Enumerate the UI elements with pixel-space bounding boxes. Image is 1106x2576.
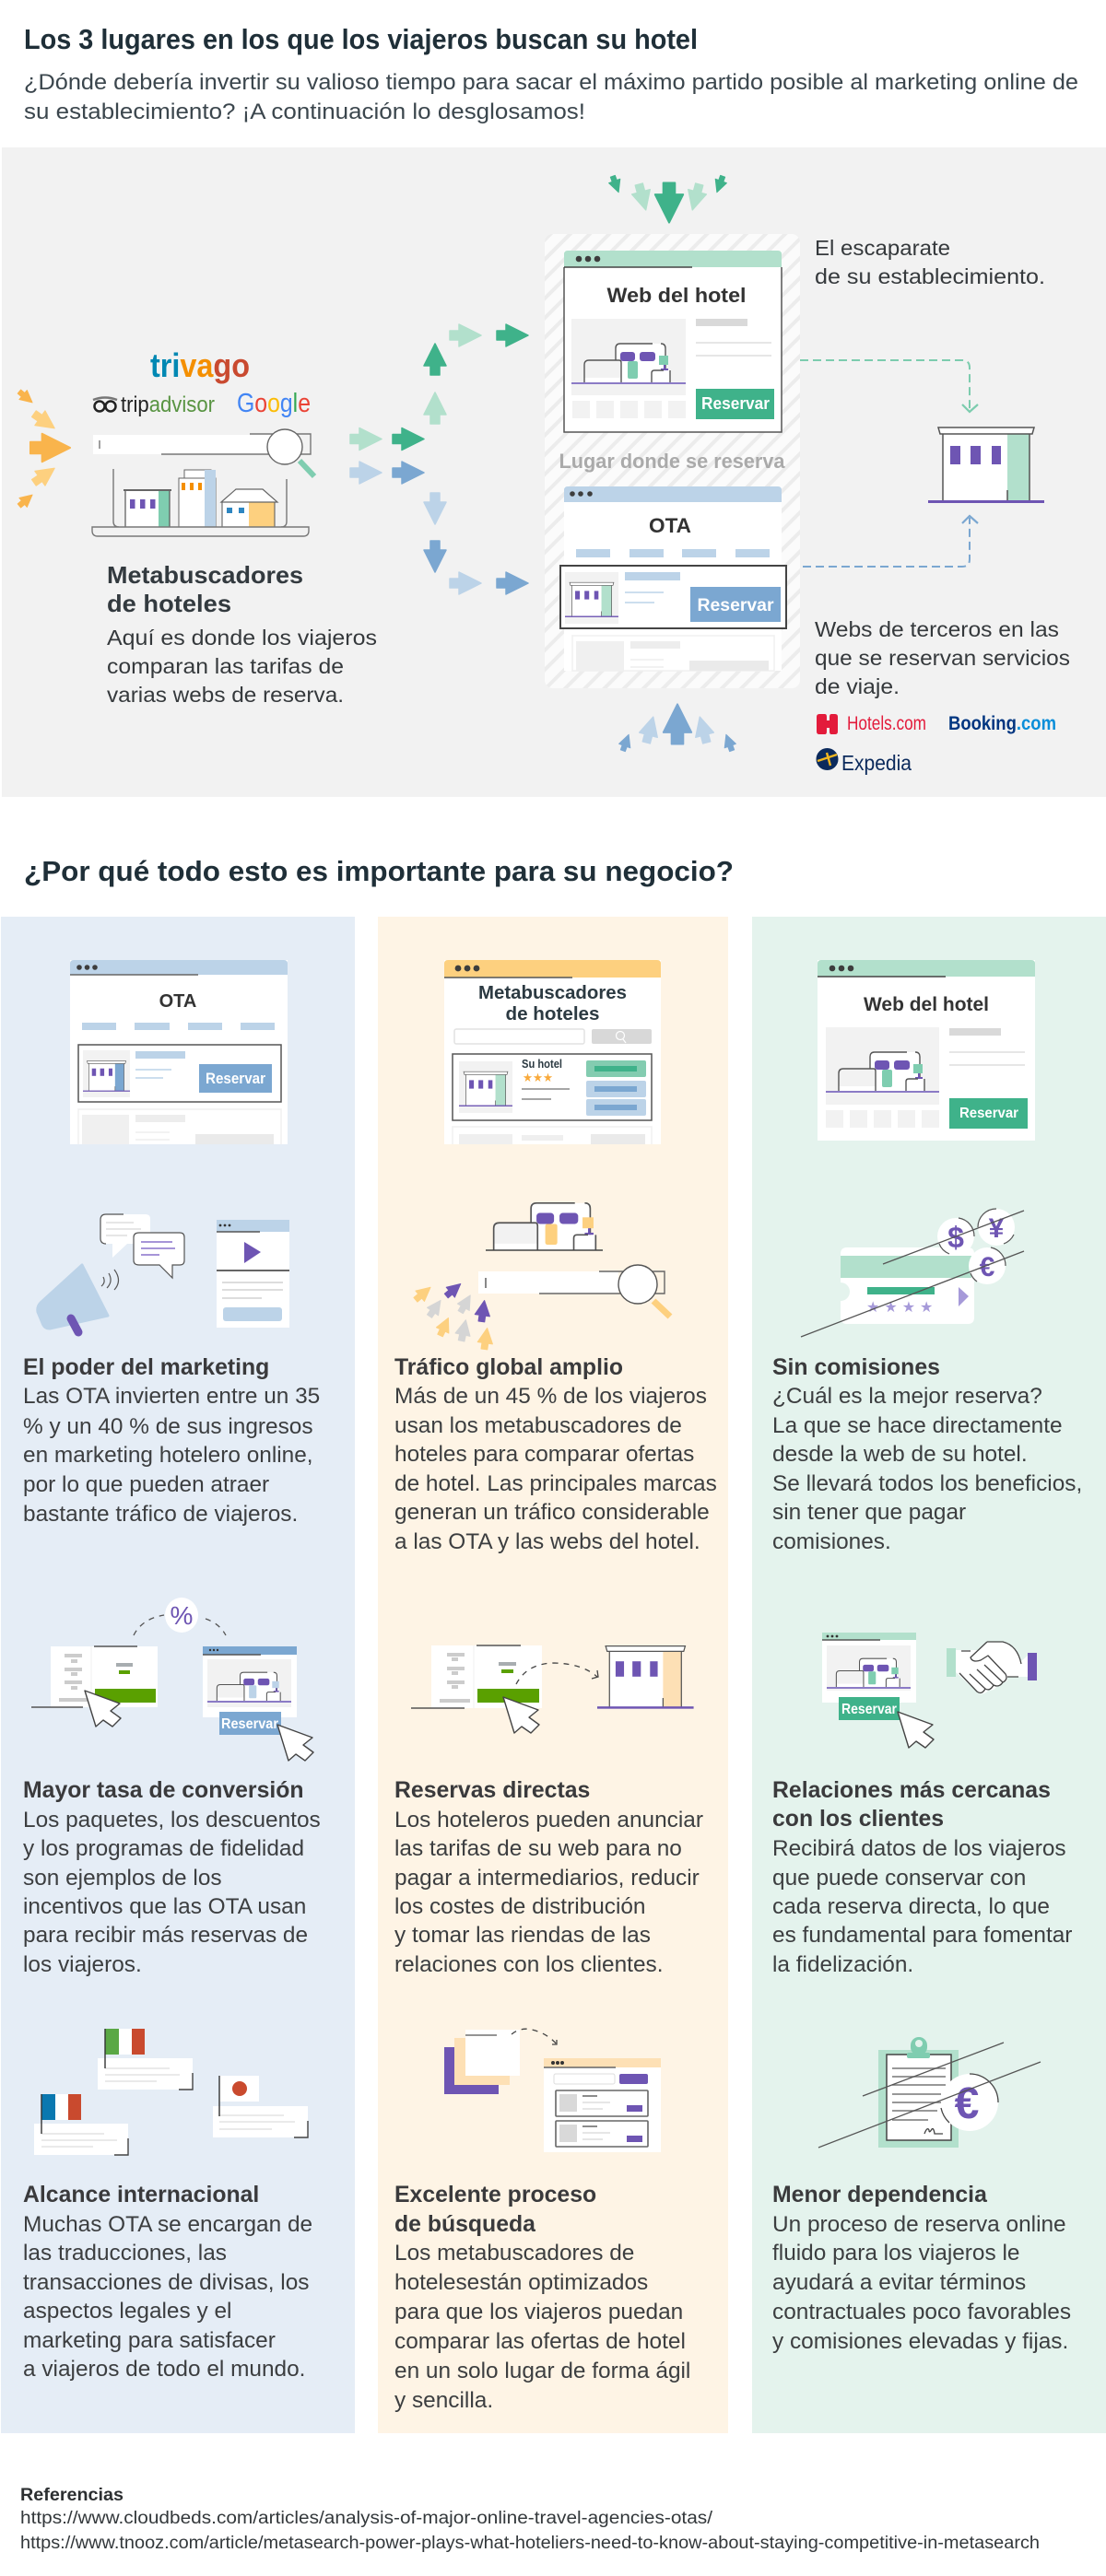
text: mayor tasa de conversión: y los programas de fidelidad [23,1836,304,1861]
text: webs de terceros: que se reservan servicios [815,646,1070,670]
text: metabuscadores de hoteles: comparan las tarifas de [107,654,344,678]
text: el escaparate: El escaparate [815,236,950,260]
text: menor dependencia: Menor dependencia [772,2183,987,2207]
text: reservas directas: relaciones con los clientes. [394,1952,664,1977]
icon: conversion with discount [31,1598,313,1761]
icon: national flags with cards [34,2029,308,2155]
text: excelente proceso de búsqueda: Los metabuscadores de [394,2241,634,2266]
text: el poder del marketing: El poder del marketing [23,1355,269,1380]
text: el poder del marketing: por lo que pueden atraer [23,1472,269,1497]
text: alcance internacional: Alcance internacional [23,2183,259,2207]
text: sin comisiones: Sin comisiones [772,1355,940,1380]
text: reservas directas [394,1778,703,1977]
logos: OTA brands: Hotels.com [847,713,926,734]
browser: metabuscadores: Metabuscadores [478,983,627,1003]
references: https://www.cloudbeds.com/articles/analysis-of-major-online-travel-agencies-otas/ [20,2509,713,2528]
icon: search bar with magnifier [93,429,314,476]
text: reservas directas: y tomar las riendas de las [394,1923,651,1948]
text: excelente proceso de búsqueda: Excelente proceso [394,2183,596,2207]
text: relaciones más cercanas [772,1778,1072,1977]
text: relaciones más cercanas: es fundamental para fomentar [772,1923,1072,1948]
browser: web del hotel: Web del hotel [864,994,989,1015]
text: mayor tasa de conversión [23,1778,321,1977]
connector: blue dashed to hotel [803,516,978,567]
text: sin comisiones [772,1355,1082,1554]
icon: clipboard contract and euro: € [955,2079,979,2128]
text: el poder del marketing [23,1355,320,1527]
arrows: blue path to OTA [350,462,528,594]
browser: metabuscadores [444,960,661,1144]
references: Referencias [20,2486,124,2505]
text: sin comisiones: La que se hace directamente [772,1413,1063,1438]
text: tráfico global amplio: generan un tráfico considerable [394,1500,710,1525]
text: mayor tasa de conversión: para recibir más reservas de [23,1923,308,1948]
icon: ticket and coins: ★★★★ [866,1300,937,1316]
references [20,2486,1040,2553]
browser: metabuscadores: de hoteles [505,1004,599,1025]
browser: OTA [70,960,288,1144]
text: reservas directas: Los hoteleros pueden anunciar [394,1808,703,1832]
text: webs de terceros: Webs de terceros en las [815,617,1059,641]
logos: OTA brands: Booking.com [948,713,1056,734]
heading: por qué es importante: ¿Por qué todo esto es importante para su negocio? [24,855,734,887]
text: mayor tasa de conversión: Mayor tasa de conversión [23,1778,304,1803]
text: alcance internacional: marketing para satisfacer [23,2328,276,2353]
icon: laptop with buildings [92,469,309,536]
browser: web del hotel: Reservar [959,1106,1018,1121]
text: excelente proceso de búsqueda: de búsqueda [394,2212,535,2237]
text: reservas directas: los costes de distribución [394,1894,646,1919]
text: alcance internacional: a viajeros de todo el mundo. [23,2357,305,2382]
text: reservas directas: las tarifas de su web para no [394,1836,682,1861]
text: metabuscadores de hoteles: Aquí es donde los viajeros [107,626,377,650]
logos: metasearch brands: Google [237,389,311,418]
text: reservas directas: pagar a intermediarios, reducir [394,1866,700,1891]
text: alcance internacional: aspectos legales y el [23,2299,231,2324]
browser: metabuscadores: Su hotel [522,1057,562,1071]
text: relaciones más cercanas: cada reserva directa, lo que [772,1894,1050,1919]
text: excelente proceso de búsqueda: hotelesestán optimizados [394,2270,648,2295]
text: menor dependencia [772,2183,1071,2354]
text: el poder del marketing: bastante tráfico de viajeros. [23,1502,298,1527]
browser: web del hotel [564,251,782,432]
icon: ticket and coins: ¥ [989,1213,1005,1244]
browser: web del hotel: Reservar [701,394,770,413]
text: menor dependencia: ayudará a evitar términos [772,2270,1026,2295]
text: sin comisiones: Se llevará todos los beneficios, [772,1471,1082,1496]
icon: conversion with discount: Reservar [221,1716,278,1732]
text: excelente proceso de búsqueda: en un solo lugar de forma ágil [394,2359,690,2383]
text: relaciones más cercanas: Relaciones más cercanas [772,1778,1051,1803]
text: menor dependencia: contractuales poco favorables [772,2300,1071,2324]
text: tráfico global amplio: de hotel. Las principales marcas [394,1471,717,1496]
logos: metasearch brands: tripadvisor [121,392,215,417]
text: alcance internacional [23,2183,312,2382]
text: relaciones más cercanas: que puede conservar con [772,1866,1026,1891]
browser: OTA: Reservar [206,1070,265,1087]
text: tráfico global amplio: usan los metabuscadores de [394,1413,682,1438]
logos: metasearch brands: trivago [150,346,250,384]
title: Los 3 lugares en los que los viajeros buscan su hotel [24,23,698,55]
icon: room and traffic search [411,1203,670,1351]
browser: OTA: OTA [159,991,196,1012]
text: tráfico global amplio [394,1355,717,1554]
text: el poder del marketing: % y un 40 % de sus ingresos [23,1414,313,1439]
text: tráfico global amplio: Más de un 45 % de los viajeros [394,1384,707,1409]
icon: booking and handshake: Reservar [841,1702,897,1717]
logos: OTA brands [817,713,1056,775]
icon: booking and handshake [822,1633,1037,1748]
text: webs de terceros [815,617,1070,698]
text: mayor tasa de conversión: incentivos que las OTA usan [23,1894,306,1919]
text: relaciones más cercanas: Recibirá datos de los viajeros [772,1836,1066,1861]
panel: OTA column [1,917,355,2433]
text: mayor tasa de conversión: Los paquetes, los descuentos [23,1808,321,1832]
text: webs de terceros: de viaje. [815,674,900,698]
icon: conversion with discount: % [171,1601,193,1630]
text: excelente proceso de búsqueda: para que los viajeros puedan [394,2300,683,2324]
text: excelente proceso de búsqueda [394,2183,690,2413]
browser: metabuscadores: ★★★ [523,1071,553,1084]
arrows: orange traffic entering [16,387,70,510]
text: relaciones más cercanas: con los clientes [772,1807,944,1832]
panel: hotel website column [752,917,1106,2433]
icon: megaphone and video ad [38,1214,289,1332]
text: menor dependencia: Un proceso de reserva online [772,2212,1066,2237]
text: metabuscadores de hoteles: varias webs de reserva. [107,683,344,707]
text: reservas directas: Reservas directas [394,1778,590,1803]
text: el poder del marketing: en marketing hotelero online, [23,1443,313,1468]
text: alcance internacional: las traducciones, las [23,2241,227,2266]
text: mayor tasa de conversión: los viajeros. [23,1952,142,1977]
arrows: green traffic entering from top [607,174,728,223]
text: metabuscadores de hoteles: de hoteles [107,590,231,617]
connector: green dashed to hotel [800,360,978,412]
text: menor dependencia: y comisiones elevadas y fijas. [772,2329,1068,2354]
arrows: blue traffic entering from bottom [618,704,737,753]
icon: hotel building [928,427,1044,503]
text: mayor tasa de conversión: son ejemplos de los [23,1866,222,1891]
browser: web del hotel [818,960,1035,1141]
text: sin comisiones: ¿Cuál es la mejor reserva? [772,1384,1042,1409]
text: tráfico global amplio: hoteles para comparar ofertas [394,1442,694,1467]
intro text [24,70,1078,124]
panel: metasearch column [378,917,728,2433]
icon: clipboard contract and euro [818,2037,1041,2148]
text: el escaparate: de su establecimiento. [815,264,1045,288]
text: metabuscadores de hoteles: Metabuscadores [107,561,303,589]
browser: OTA: Reservar [697,596,774,615]
logos: OTA brands: Expedia [841,751,912,775]
icon: ticket and coins [801,1209,1024,1337]
text: sin comisiones: desde la web de su hotel. [772,1442,1028,1467]
text: el poder del marketing: Las OTA invierten entre un 35 [23,1384,320,1409]
text: excelente proceso de búsqueda: y sencilla. [394,2388,493,2413]
icon: stacked pages and search results [444,2029,661,2152]
icon: ticket and coins: € [980,1252,995,1282]
browser: OTA: OTA [649,514,691,537]
panel: booking places hatched [545,234,800,688]
text: tráfico global amplio: Tráfico global amplio [394,1355,623,1380]
text: excelente proceso de búsqueda: comparar las ofertas de hotel [394,2329,686,2354]
text: metabuscadores de hoteles [107,561,377,707]
text: tráfico global amplio: a las OTA y las webs del hotel. [394,1529,700,1554]
intro text: ¿Dónde debería invertir su valioso tiempo para sacar el máximo partido posible al marketing online de [24,70,1078,95]
label: lugar donde se reserva: Lugar donde se reserva [559,450,785,473]
panel: booking flow diagram [2,147,1106,797]
text: el escaparate [815,236,1045,288]
text: sin comisiones: sin tener que pagar [772,1500,966,1525]
text: alcance internacional: transacciones de divisas, los [23,2270,309,2295]
browser: web del hotel: Web del hotel [606,284,747,307]
browser: OTA [560,486,786,671]
arrows: green path to hotel website [350,324,528,450]
icon: ticket and coins: $ [947,1221,964,1254]
references: https://www.tnooz.com/article/metasearch-power-plays-what-hoteliers-need-to-know-about-staying-competitive-in-metasearch [20,2534,1040,2553]
text: sin comisiones: comisiones. [772,1529,891,1554]
text: alcance internacional: Muchas OTA se encargan de [23,2212,312,2237]
logos: metasearch brands [93,346,311,418]
text: menor dependencia: fluido para los viajeros le [772,2241,1019,2266]
intro text: su establecimiento? ¡A continuación lo desglosamos! [24,100,585,124]
text: relaciones más cercanas: la fidelización. [772,1952,913,1977]
icon: direct booking to hotel [411,1645,694,1733]
